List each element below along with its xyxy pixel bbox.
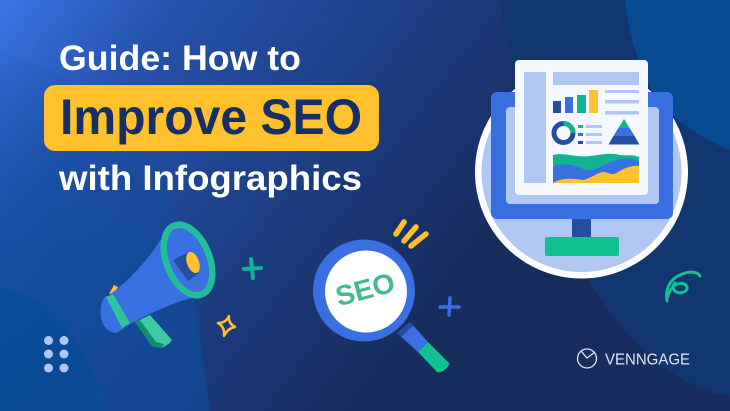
illustration: monitor with infographic: [475, 60, 688, 278]
area chart: [553, 154, 639, 183]
icon: magnifying glass: [313, 240, 449, 372]
logo: Venngage: VENNGAGE: [605, 352, 690, 368]
infographic document: [515, 60, 648, 195]
icon: six dots: [44, 336, 68, 372]
icon: plus green: [244, 259, 261, 278]
bar chart: [553, 90, 598, 113]
SEO label: SEO: [332, 267, 398, 312]
icon: sparkle yellow: [218, 316, 235, 336]
logo: Venngage: [578, 349, 690, 368]
icon: yellow rays: [396, 222, 426, 246]
icon: plus blue: [440, 298, 459, 315]
donut chart: [554, 124, 573, 142]
pyramid chart: [608, 119, 640, 144]
title: Guide: How to: Guide: How to: [59, 39, 301, 78]
text lines: [605, 90, 639, 114]
icon: green squiggle: [667, 272, 700, 301]
highlighted title pill: Improve SEO: [60, 89, 362, 145]
donut legend: [578, 125, 602, 144]
icon: megaphone: [101, 218, 222, 348]
title: with Infographics: with Infographics: [58, 159, 362, 198]
